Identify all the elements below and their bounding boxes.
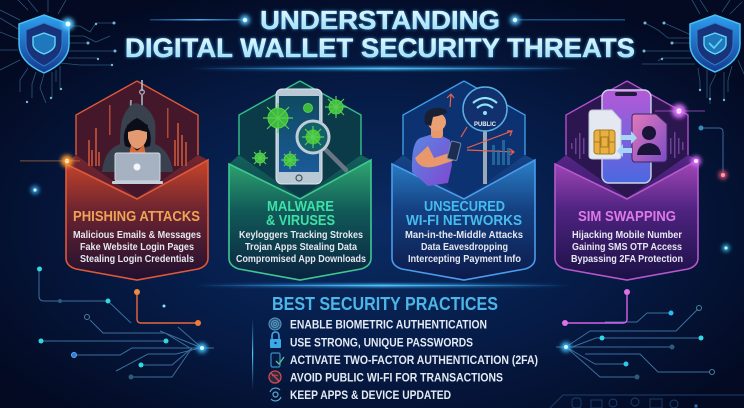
item: public wi-fi: AVOID PUBLIC WI-FI FOR TRANSACTIONS (290, 370, 503, 384)
icon: no wi-fi (269, 371, 281, 383)
icon: left shield (19, 15, 69, 73)
heading: unsecured wi-fi networks (406, 199, 522, 229)
separator line (195, 284, 570, 390)
list: best security practices (269, 318, 538, 402)
title: DIGITAL WALLET SECURITY THREATS (125, 33, 635, 63)
title accent lines (150, 15, 625, 70)
heading: phishing attacks: PHISHING ATTACKS (73, 209, 200, 225)
text block: wi-fi details: Man-in-the-Middle Attacks (405, 230, 523, 241)
text block: phishing details: Stealing Login Credentials (80, 254, 194, 265)
icon: phone check (271, 353, 284, 367)
item: biometric: ENABLE BIOMETRIC AUTHENTICATION (290, 318, 487, 332)
panel: malware and viruses (229, 81, 371, 280)
icon: right shield (690, 15, 740, 72)
icon: fingerprint (269, 318, 281, 330)
text block: phishing details: Malicious Emails & Messages (73, 230, 201, 241)
text block: sim swapping details: Hijacking Mobile Number (572, 230, 682, 241)
heading: best security practices: BEST SECURITY PRACTICES (272, 294, 498, 314)
icon: sim swap phone (571, 90, 684, 183)
item: two-factor: ACTIVATE TWO-FACTOR AUTHENTICATION (2FA) (290, 353, 538, 367)
text block: sim swapping details: Bypassing 2FA Protection (571, 254, 683, 265)
heading: malware and viruses (266, 199, 335, 229)
icon: phone with viruses and magnifier (252, 89, 347, 184)
bottom right faint icon strip (550, 395, 744, 408)
right shield with circuit (642, 0, 744, 104)
icon: person on public wi-fi: PUBLIC (474, 121, 496, 128)
icon: refresh (270, 388, 281, 401)
text block: phishing details (73, 230, 201, 265)
heading: unsecured wi-fi networks: WI-FI NETWORKS (406, 213, 522, 229)
item: updates: KEEP APPS & DEVICE UPDATED (290, 388, 451, 402)
heading: malware and viruses: MALWARE (267, 199, 334, 215)
left circuit (37, 266, 214, 380)
title (125, 5, 635, 63)
panel: unsecured wi-fi networks (392, 81, 535, 280)
heading: unsecured wi-fi networks: UNSECURED (424, 199, 505, 215)
left shield with circuit (0, 0, 116, 103)
icon: padlock (270, 332, 281, 348)
icon: person on public wi-fi (412, 87, 514, 186)
icon: hacker (88, 80, 187, 184)
text block: wi-fi details: Intercepting Payment Info (408, 254, 521, 265)
panel: sim swapping (555, 81, 698, 280)
text block: malware details: Compromised App Downloads (236, 254, 366, 265)
panel: phishing attacks (66, 80, 208, 280)
text block: sim swapping details (571, 230, 683, 265)
text block: wi-fi details: Data Eavesdropping (421, 242, 508, 253)
item: passwords: USE STRONG, UNIQUE PASSWORDS (290, 336, 473, 350)
text block: malware details: Trojan Apps Stealing Data (245, 242, 357, 253)
heading: malware and viruses: & VIRUSES (266, 213, 335, 229)
title: UNDERSTANDING (260, 5, 500, 35)
text block: malware details: Keyloggers Tracking Strokes (239, 230, 363, 241)
right circuit (556, 289, 714, 380)
heading: sim swapping: SIM SWAPPING (578, 209, 676, 225)
text block: malware details (236, 230, 366, 265)
text block: sim swapping details: Gaining SMS OTP Access (572, 242, 682, 253)
text block: phishing details: Fake Website Login Pages (80, 242, 194, 253)
text block: wi-fi details (405, 230, 523, 265)
flares (20, 104, 730, 252)
